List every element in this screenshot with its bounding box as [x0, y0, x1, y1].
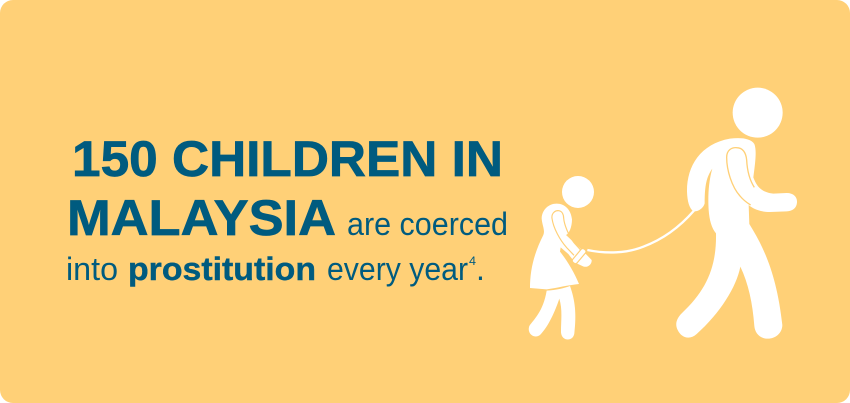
child head — [562, 176, 594, 208]
child body and dress — [530, 204, 592, 289]
adult arm outline — [727, 148, 754, 205]
heading line 2: MALAYSIA — [67, 190, 336, 246]
child wristband — [571, 248, 587, 265]
child legs — [529, 286, 575, 339]
text: period: . — [476, 251, 485, 287]
heading and statement text — [66, 131, 508, 287]
leash — [587, 211, 694, 252]
text: prostitution: prostitution — [128, 251, 316, 287]
text: are coerced: are coerced — [347, 206, 508, 242]
adult body — [676, 138, 797, 339]
text: every year: every year — [327, 251, 468, 287]
icon: adult leading child on a leash — [529, 88, 797, 339]
text: into: into — [66, 251, 118, 287]
footnote marker: 4 — [469, 254, 476, 268]
heading line 1: 150 CHILDREN IN — [72, 131, 503, 187]
adult head — [733, 88, 783, 138]
child arm outline — [552, 211, 581, 255]
